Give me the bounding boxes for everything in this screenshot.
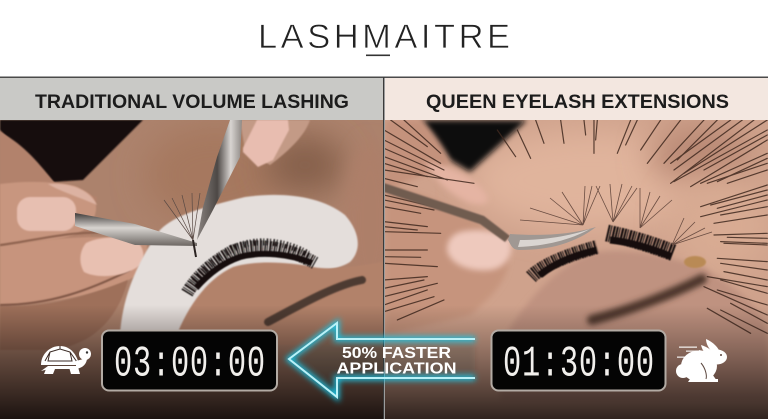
fingernail 3 top xyxy=(243,120,289,167)
arrow: 50% faster application: APPLICATION xyxy=(336,360,456,378)
icon: rabbit xyxy=(676,339,727,382)
hand upper xyxy=(1,132,56,183)
header: traditional volume lashing: TRADITIONAL VOLUME LASHING xyxy=(35,91,349,113)
header: traditional volume lashing xyxy=(0,78,383,120)
eye pad xyxy=(120,195,358,340)
header: queen eyelash extensions: QUEEN EYELASH EXTENSIONS xyxy=(426,91,729,113)
bottom shade xyxy=(385,305,768,419)
logo: Lashmaitre: LASHMAITRE xyxy=(258,18,510,56)
lashes xyxy=(187,242,315,293)
lashes xyxy=(531,233,674,277)
photo: traditional lash application xyxy=(0,120,396,419)
panel: traditional volume lashing xyxy=(0,120,396,419)
tweezers vertical xyxy=(197,120,242,240)
eyelid xyxy=(510,250,766,374)
panel: queen eyelash extensions xyxy=(384,120,768,419)
header: queen eyelash extensions xyxy=(385,78,768,120)
lash fan xyxy=(164,193,200,240)
arrow label: 50% FASTER xyxy=(342,345,451,362)
bottom shade xyxy=(0,305,383,419)
timer: 03:00:00: 03:00:00 xyxy=(114,341,265,389)
eyebrow xyxy=(268,280,362,322)
hand lower xyxy=(0,237,147,305)
tweezers horizontal xyxy=(75,213,197,246)
blurred hand xyxy=(385,185,508,335)
fingernail 2 xyxy=(80,237,144,276)
icon: turtle xyxy=(41,346,91,374)
top finger xyxy=(240,120,310,165)
speed lines xyxy=(384,120,767,333)
eyebrow xyxy=(592,279,702,320)
fingernail 1 xyxy=(17,197,76,231)
arrow: 50% faster application xyxy=(289,323,475,397)
eyelid xyxy=(178,262,338,330)
lash fans xyxy=(520,184,712,245)
timer: 01:30:00: 01:30:00 xyxy=(503,341,654,389)
tweezers xyxy=(384,183,510,242)
photo: queen lash application xyxy=(384,120,768,419)
